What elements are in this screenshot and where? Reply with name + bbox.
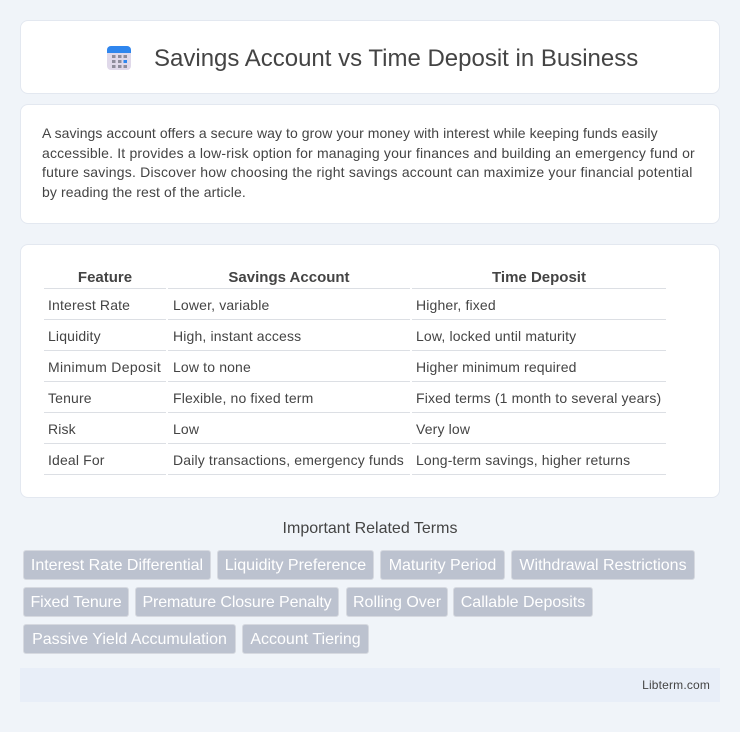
related terms tags: Fixed Tenure <box>30 594 122 611</box>
related terms tags: Rolling Over <box>353 594 441 611</box>
row: minimum deposit: Minimum Deposit <box>48 359 161 375</box>
related terms tags: Withdrawal Restrictions <box>519 557 687 574</box>
related terms tags: Account Tiering <box>250 631 361 648</box>
table header <box>78 269 586 286</box>
row: tenure: Flexible, no fixed term <box>173 390 313 406</box>
row: minimum deposit: Higher minimum required <box>416 359 577 375</box>
row: interest rate <box>48 297 496 313</box>
row: ideal for: Daily transactions, emergency funds <box>173 452 404 468</box>
row: risk: Risk <box>48 421 76 437</box>
row: interest rate: Lower, variable <box>173 297 269 313</box>
row: minimum deposit: Low to none <box>173 359 251 375</box>
related terms tags: Callable Deposits <box>461 594 585 611</box>
row: interest rate: Interest Rate <box>48 297 130 313</box>
intro paragraph: future savings. Discover how choosing the right savings account can maximize your financial potential <box>42 164 693 180</box>
row: risk <box>48 421 470 437</box>
footer <box>20 668 720 702</box>
related terms tags: Premature Closure Penalty <box>142 594 332 611</box>
related terms tags: Passive Yield Accumulation <box>32 631 227 648</box>
related terms tags: Maturity Period <box>389 557 496 574</box>
row: ideal for: Long-term savings, higher returns <box>416 452 630 468</box>
row: ideal for <box>48 452 630 468</box>
row: tenure: Fixed terms (1 month to several years) <box>416 390 661 406</box>
table header: Feature <box>78 269 132 286</box>
related terms tags: Interest Rate Differential <box>31 557 203 574</box>
row: interest rate: Higher, fixed <box>416 297 496 313</box>
row: ideal for: Ideal For <box>48 452 105 468</box>
intro paragraph: A savings account offers a secure way to grow your money with interest while keeping funds easily <box>42 125 658 141</box>
table header: Time Deposit <box>492 269 586 286</box>
intro text panel <box>20 104 720 224</box>
row: tenure: Tenure <box>48 390 92 406</box>
row: liquidity: Liquidity <box>48 328 101 344</box>
intro paragraph <box>42 125 695 200</box>
row: risk: Low <box>173 421 199 437</box>
related terms tags: Liquidity Preference <box>225 557 366 574</box>
row: risk: Very low <box>416 421 470 437</box>
footer credit: Libterm.com <box>642 678 710 692</box>
title card <box>20 20 720 94</box>
table header: Savings Account <box>228 269 350 286</box>
row: liquidity: Low, locked until maturity <box>416 328 576 344</box>
row: tenure <box>48 390 661 406</box>
row: liquidity: High, instant access <box>173 328 301 344</box>
intro paragraph: by reading the rest of the article. <box>42 184 246 200</box>
title: Savings Account vs Time Deposit in Business <box>154 45 638 72</box>
related terms tags <box>23 550 695 654</box>
comparison table panel <box>20 244 720 498</box>
icon: calendar <box>107 46 131 70</box>
intro paragraph: accessible. It provides a low-risk option for managing your finances and building an emergency fund or <box>42 144 695 160</box>
row: minimum deposit <box>48 359 577 375</box>
related terms heading: Important Related Terms <box>283 520 457 537</box>
row: liquidity <box>48 328 576 344</box>
